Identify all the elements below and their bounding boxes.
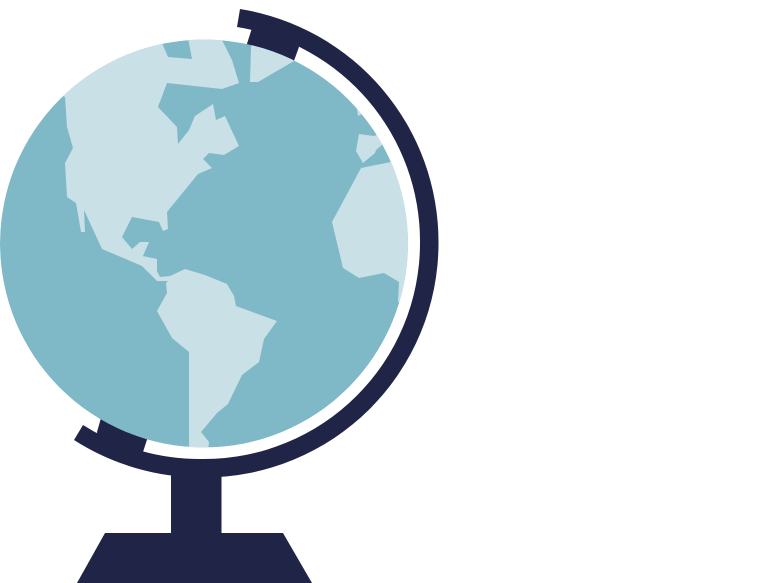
top collar bbox=[245, 28, 299, 69]
globe bbox=[0, 35, 420, 450]
greenland bbox=[250, 45, 294, 82]
europe bbox=[356, 134, 382, 163]
stand: neck bbox=[171, 470, 222, 535]
ocean bbox=[0, 40, 408, 448]
scandinavia bbox=[357, 109, 362, 116]
stand: base bbox=[77, 533, 312, 583]
americas bbox=[50, 38, 277, 450]
meridian arc bbox=[74, 9, 439, 478]
illustration: desk globe bbox=[0, 9, 438, 583]
africa bbox=[332, 162, 408, 302]
bottom collar bbox=[97, 418, 148, 452]
